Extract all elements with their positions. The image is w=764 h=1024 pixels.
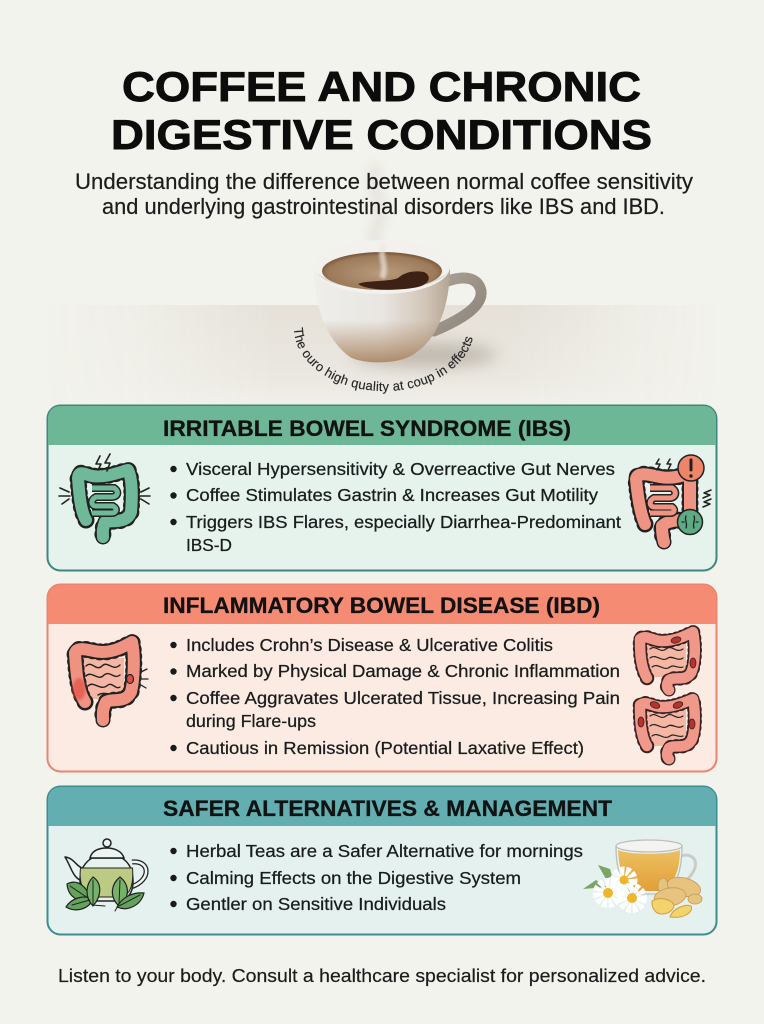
alternatives bullet list: Herbal Teas are a Safer Alternative for mornings [186, 841, 583, 861]
IBD header band [48, 585, 716, 624]
alternatives header band [48, 787, 716, 826]
IBD bullet list [170, 635, 620, 758]
title: COFFEE AND CHRONIC [122, 63, 641, 110]
footer note: Listen to your body. Consult a healthcare specialist for personalized advice. [58, 965, 706, 986]
IBD panel body [48, 584, 716, 772]
IBS panel body [48, 406, 716, 570]
panel: IBD [48, 584, 716, 772]
steam [373, 165, 381, 275]
IBS bullet list: Visceral Hypersensitivity & Overreactive Gut Nerves [186, 459, 615, 479]
IBD bullet list: during Flare-ups [186, 711, 316, 731]
IBD heading: INFLAMMATORY BOWEL DISEASE (IBD) [163, 593, 600, 618]
curved caption: The ouro high quality at coup in effects [294, 327, 472, 394]
alternatives panel body [48, 786, 716, 934]
icon: colon with alert and cramp badges [636, 455, 711, 542]
title [111, 63, 652, 158]
title: DIGESTIVE CONDITIONS [111, 111, 652, 158]
IBD bullet list: Cautious in Remission (Potential Laxative Effect) [186, 738, 584, 758]
alternatives bullet list [170, 841, 583, 914]
icon: inflamed colon [72, 642, 148, 720]
IBS bullet list: Coffee Stimulates Gastrin & Increases Gut Motility [186, 485, 598, 505]
surface steam [382, 244, 384, 278]
IBS heading: IRRITABLE BOWEL SYNDROME (IBS) [163, 416, 571, 441]
subtitle [75, 169, 693, 219]
dark coffee swirl [358, 271, 429, 290]
panel: IBS [48, 406, 716, 570]
IBD bullet list: Coffee Aggravates Ulcerated Tissue, Increasing Pain [186, 688, 620, 708]
icon: chamomile ginger tea [583, 840, 703, 917]
IBS bullet list [170, 459, 621, 555]
icon: herbal teapot [65, 839, 146, 911]
cup rim [314, 240, 450, 294]
IBS header band [48, 406, 716, 445]
subtitle: and underlying gastrointestinal disorders like IBS and IBD. [102, 194, 665, 219]
table surface [162, 305, 624, 392]
alternatives heading: SAFER ALTERNATIVES & MANAGEMENT [163, 796, 613, 821]
IBS bullet list: IBS-D [186, 535, 232, 555]
IBD bullet list: Marked by Physical Damage & Chronic Inflammation [186, 661, 620, 681]
subtitle: Understanding the difference between normal coffee sensitivity [75, 169, 693, 194]
IBS bullet list: Triggers IBS Flares, especially Diarrhea-Predominant [186, 512, 621, 532]
cup handle [434, 278, 481, 331]
icon: Crohn's disease colon [640, 632, 696, 690]
icon: green colon with nerves [59, 454, 150, 537]
IBD bullet list: Includes Crohn’s Disease & Ulcerative Colitis [186, 635, 553, 655]
alternatives bullet list: Calming Effects on the Digestive System [186, 868, 521, 888]
icon: ulcerative colitis colon [638, 699, 695, 759]
coffee [322, 252, 442, 290]
cup shadow [353, 343, 497, 367]
cup body [314, 268, 450, 362]
coffee cup illustration [294, 240, 499, 394]
alternatives bullet list: Gentler on Sensitive Individuals [186, 894, 446, 914]
panel: safer alternatives [48, 786, 716, 934]
